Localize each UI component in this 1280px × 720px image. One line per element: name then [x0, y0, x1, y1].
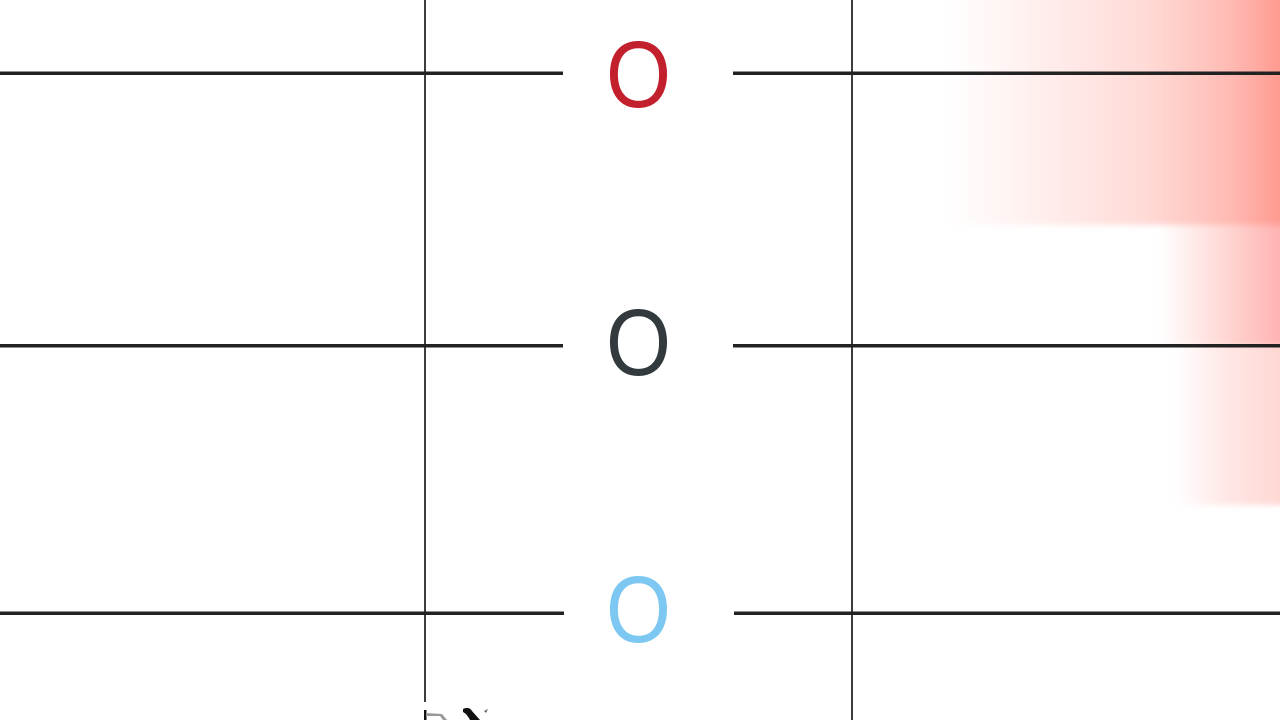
- clipped mark at bottom edge: [424, 708, 488, 720]
- dark value label: O: [606, 289, 671, 395]
- vertical guide lines: [424, 0, 853, 720]
- heat gradient: upper right block: [945, 0, 1280, 505]
- red value label: O: [606, 21, 671, 127]
- level line: middle: [0, 344, 1280, 348]
- level line: bottom: [0, 612, 1280, 615]
- blue value label: O: [606, 556, 671, 662]
- level line: top: [0, 72, 1280, 75]
